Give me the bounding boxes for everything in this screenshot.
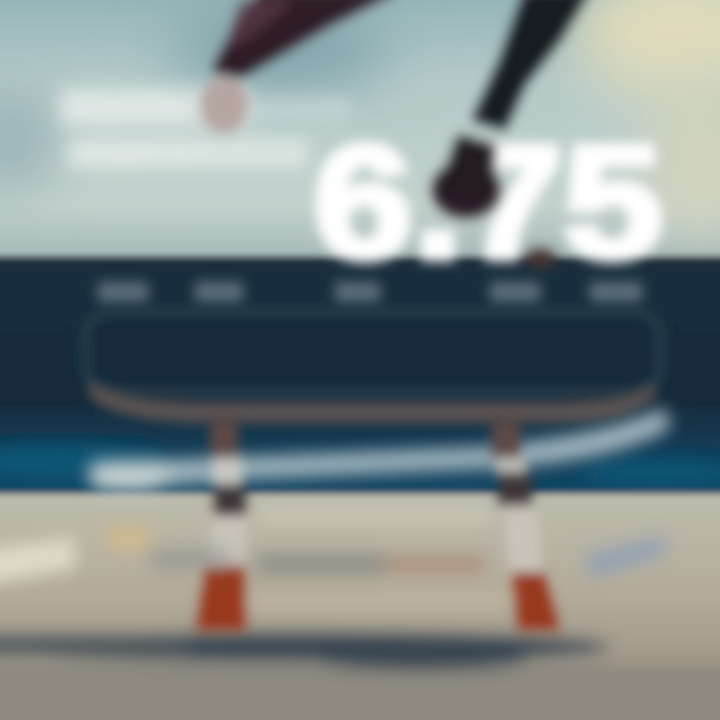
hurdle left leg [196,420,246,630]
background: ground [0,494,720,720]
background: dark water band [0,256,720,496]
background: sky [0,0,720,262]
big number: 6.75 [313,112,663,291]
white swoosh under hurdle [88,408,670,491]
athlete: right leg and foot [432,0,590,268]
athlete: left foot and leg [200,0,400,133]
column labels row [98,282,642,302]
hurdle right leg [492,420,560,630]
hurdle shadow on ground [0,634,610,668]
title block (blurred heading) [60,87,350,172]
title block (blurred heading): Height in [68,139,196,172]
title block (blurred heading): Hurdle [62,87,189,131]
ground labels row [0,510,665,608]
hurdle top bar [90,380,655,422]
hurdle panel: rounded dark outline [86,312,660,392]
